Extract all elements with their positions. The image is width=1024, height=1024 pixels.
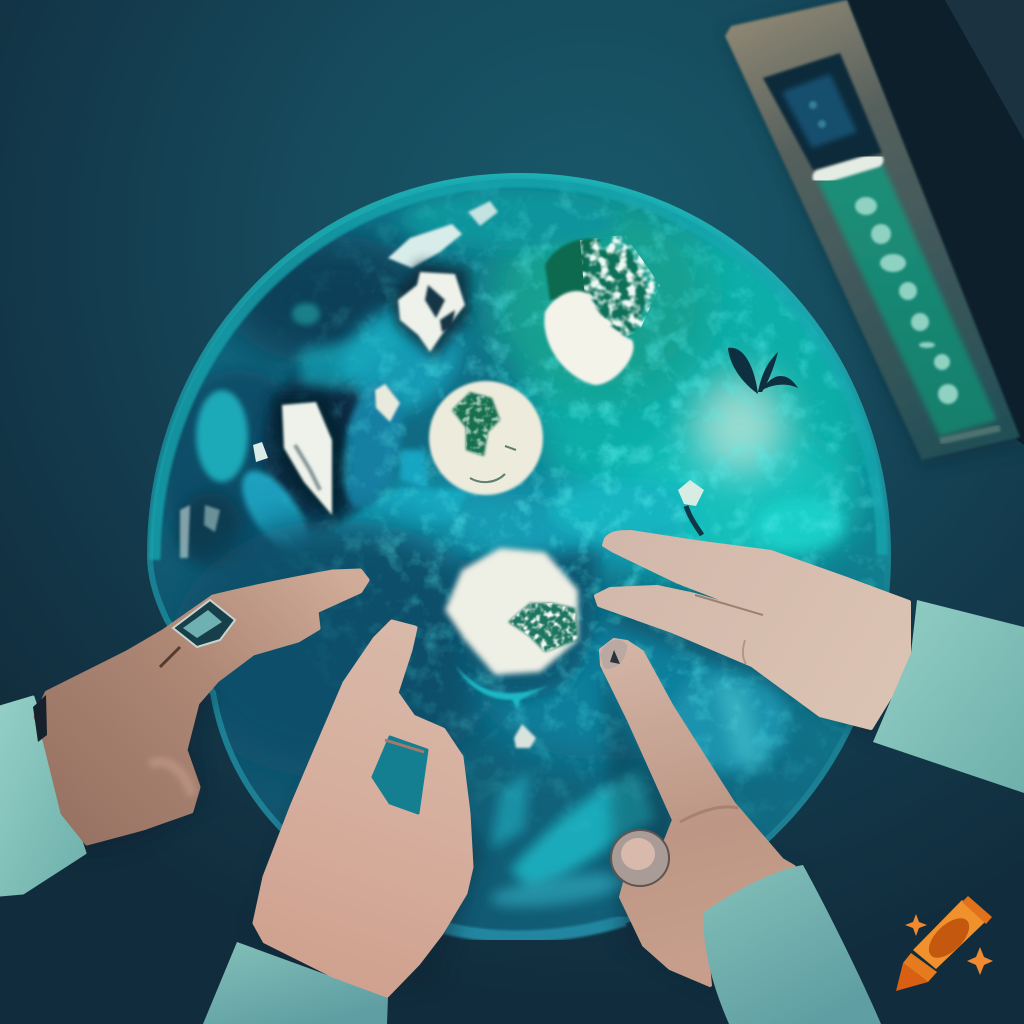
landmass: left white island: [180, 384, 400, 558]
hand: bottom centre: [203, 622, 485, 1024]
ring: bottom right hand: [611, 830, 669, 886]
device: screen: [763, 53, 882, 170]
ring: left hand: [173, 600, 235, 647]
device: frame: [725, 0, 1020, 460]
device: green panel: [817, 163, 997, 437]
device: dark housing behind panel: [847, 0, 1024, 445]
landmass: top white islands: [388, 201, 498, 360]
sleeve: bottom right: [703, 865, 881, 1024]
sleeve: right: [873, 600, 1024, 793]
disc: holographic earth: [150, 170, 890, 940]
fingernail: [600, 640, 627, 669]
globe: lower planet: [445, 548, 580, 748]
globe: centre planet: [429, 381, 543, 495]
crayon tip: [896, 963, 928, 991]
device: white bar: [820, 160, 876, 177]
sleeve: left: [0, 697, 85, 895]
globe: upper right cloud sphere: [544, 230, 665, 385]
sleeve: bottom centre: [203, 942, 388, 1024]
device: control panel at top right: [725, 0, 1024, 466]
hand: right with two fingers: [596, 532, 1024, 793]
device: buttons: [855, 197, 958, 404]
plant silhouette: [728, 348, 798, 394]
hand: left with ring: [0, 571, 367, 895]
disc: ocean and cloud swirls: [150, 170, 890, 940]
small white pebble: [678, 480, 704, 535]
crayon body: [913, 900, 985, 969]
hand: bottom right: [600, 640, 881, 1024]
logo: orange crayon with sparkles: [896, 896, 993, 991]
gap between fingers: [373, 737, 427, 813]
disc: rim: [150, 176, 888, 935]
